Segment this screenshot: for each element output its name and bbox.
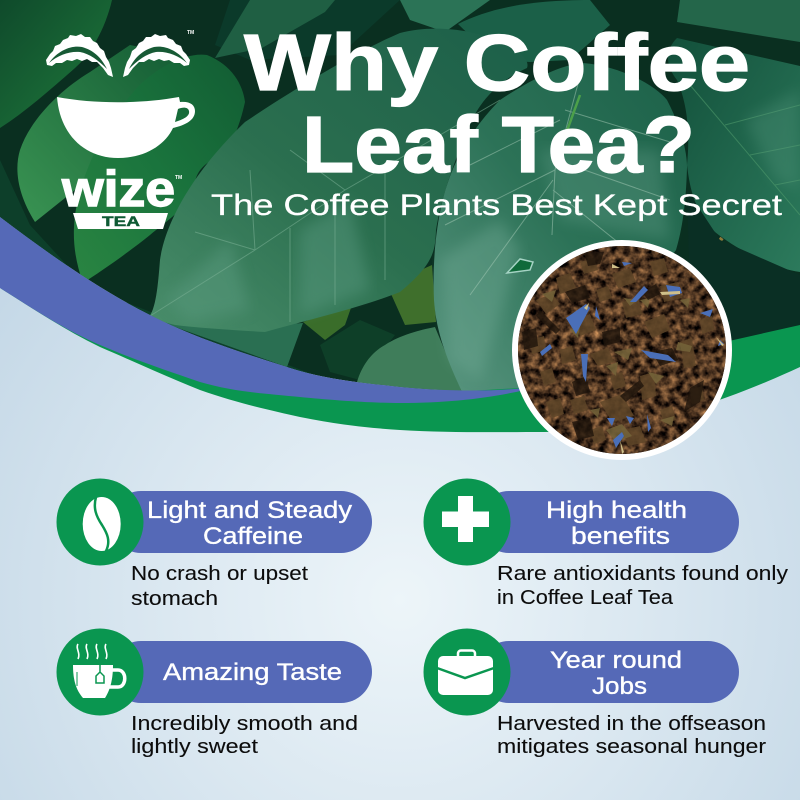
pill: caffeine heading: [110, 491, 372, 553]
feature: amazing taste: [56, 628, 372, 758]
title: [244, 18, 750, 189]
pill: health heading: High health: [546, 497, 687, 524]
logo: tea banner: [73, 213, 168, 229]
text: harvested: Harvested in the offseason: [497, 713, 766, 735]
subtitle: The Coffee Plants Best Kept Secret: [211, 189, 783, 222]
leaf photo: [0, 0, 800, 400]
logo: teacup: [57, 97, 195, 158]
pill: jobs heading: Jobs: [592, 673, 647, 700]
icon: medical cross: [424, 478, 510, 566]
logo: Wize Tea: [46, 30, 195, 229]
title: Leaf Tea?: [302, 100, 695, 189]
tea leaves circle: [512, 240, 732, 460]
pill: jobs heading: [478, 641, 739, 703]
pill: taste heading: [110, 641, 372, 703]
text: incredibly smooth: lightly sweet: [131, 736, 259, 758]
text: harvested: mitigates seasonal hunger: [497, 736, 766, 758]
pill: taste heading: Amazing Taste: [163, 659, 342, 686]
pill: caffeine heading: Caffeine: [203, 523, 303, 550]
pill: caffeine heading: Light and Steady: [147, 497, 352, 524]
logo: trademark wordmark: TM: [175, 175, 182, 181]
green swoosh band: [0, 288, 800, 432]
icon: briefcase: [424, 628, 510, 716]
pill: health heading: [478, 491, 739, 553]
logo: tea label: TEA: [102, 213, 140, 229]
pill: jobs heading: Year round: [550, 647, 682, 674]
logo: right tea leaf: [123, 34, 190, 77]
icon: teacup with steam: [56, 628, 144, 716]
text: incredibly smooth: Incredibly smooth and: [131, 713, 358, 735]
logo: wize wordmark: wize: [61, 161, 175, 217]
text: no crash: No crash or upset: [131, 563, 308, 585]
text: no crash: stomach: [131, 588, 218, 610]
feature: light and steady caffeine: [56, 478, 372, 610]
icon: coffee bean: [56, 478, 144, 566]
feature: year round jobs: [424, 628, 766, 758]
title: Why Coffee: [244, 18, 750, 107]
feature: high health benefits: [424, 478, 788, 609]
logo: left tea leaf: [46, 34, 113, 77]
text: antioxidants: in Coffee Leaf Tea: [497, 587, 674, 609]
blue swoosh band: [0, 217, 525, 403]
pill: health heading: benefits: [571, 523, 670, 550]
text: antioxidants: Rare antioxidants found only: [497, 563, 788, 585]
logo: trademark top: TM: [187, 30, 194, 36]
